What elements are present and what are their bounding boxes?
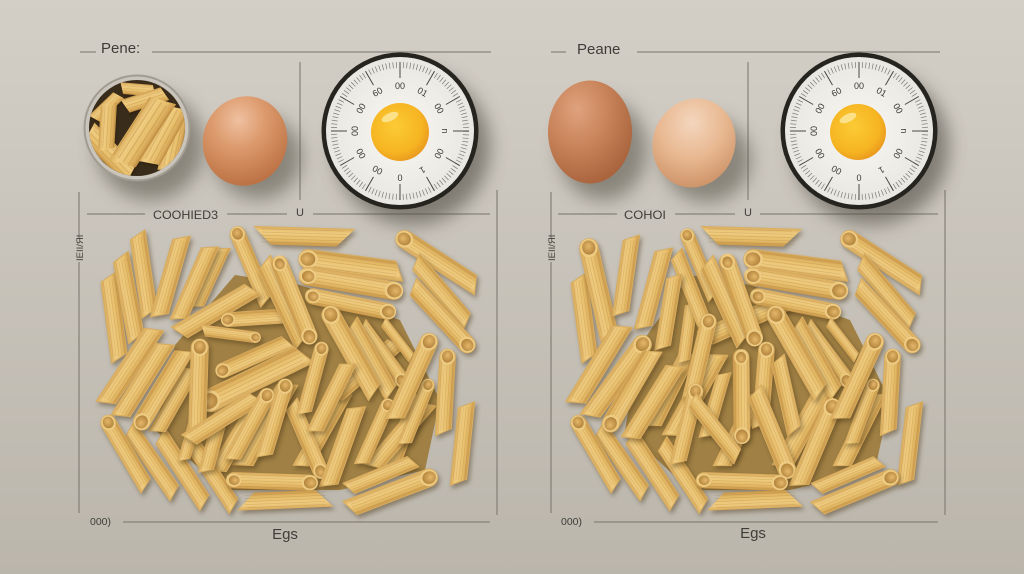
axis label: Egs: Egs [272, 526, 298, 543]
panel: left chart frame [75, 40, 497, 543]
icon: left dial timer with yolk: 00 [395, 81, 405, 91]
icon: right dial timer with yolk: 00 [830, 163, 843, 177]
icon: right dark egg [548, 80, 647, 200]
axis label: Egs: Egs [740, 525, 766, 542]
label: COOHIEDS: COOHIED3 [153, 208, 218, 222]
icon: left dial timer with yolk: 00 [432, 147, 446, 160]
icon: right dial timer with yolk: 00 [813, 147, 827, 160]
icon: left brown egg [191, 85, 302, 199]
right pile of penne [566, 226, 929, 517]
icon: left dial timer with yolk: 00 [350, 126, 360, 136]
icon: bowl of penne [79, 74, 204, 200]
icon: right dial timer with yolk: 00 [813, 102, 827, 115]
axis label: origin: 000) [561, 516, 582, 528]
label: U: U [296, 207, 304, 219]
heading: Pene: Pene: [101, 40, 140, 57]
icon: left dial timer with yolk: 00 [432, 102, 446, 115]
icon: right dial timer with yolk: 00 [891, 147, 905, 160]
left pile of penne [96, 224, 484, 518]
icon: left dial timer with yolk: 1 [418, 164, 427, 176]
panel: right chart frame [547, 41, 945, 542]
icon: right dial timer with yolk: 00 [891, 102, 905, 115]
icon: right dial timer with yolk: 00 [854, 81, 864, 91]
icon: left dial timer with yolk: 01 [416, 85, 429, 99]
icon: left dial timer with yolk: 60 [371, 85, 384, 99]
icon: right dial timer with yolk: 1 [877, 164, 886, 176]
icon: right dial timer with yolk [780, 52, 949, 225]
heading: Peane: Peane [577, 41, 620, 58]
axis label: vertical: IEII/ЯI [547, 235, 558, 261]
icon: right pale egg [639, 86, 751, 202]
icon: right dial timer with yolk: n [899, 128, 909, 134]
label: COHOI: COHOI [624, 208, 666, 222]
icon: left dial timer with yolk: 0 [397, 173, 403, 183]
icon: left dial timer with yolk: 00 [354, 147, 368, 160]
icon: right dial timer with yolk: 00 [809, 126, 819, 136]
icon: right dial timer with yolk: 0 [856, 173, 862, 183]
icon: right dial timer with yolk: 60 [830, 85, 843, 99]
icon: right dial timer with yolk: 01 [875, 85, 888, 99]
axis label: vertical: IEII/ЯI [75, 235, 86, 261]
axis label: origin: 000) [90, 516, 111, 528]
icon: left dial timer with yolk: n [440, 128, 450, 134]
label: U: U [744, 207, 752, 219]
icon: left dial timer with yolk [322, 52, 490, 225]
icon: left dial timer with yolk: 00 [354, 102, 368, 115]
icon: left dial timer with yolk: 00 [371, 163, 384, 177]
